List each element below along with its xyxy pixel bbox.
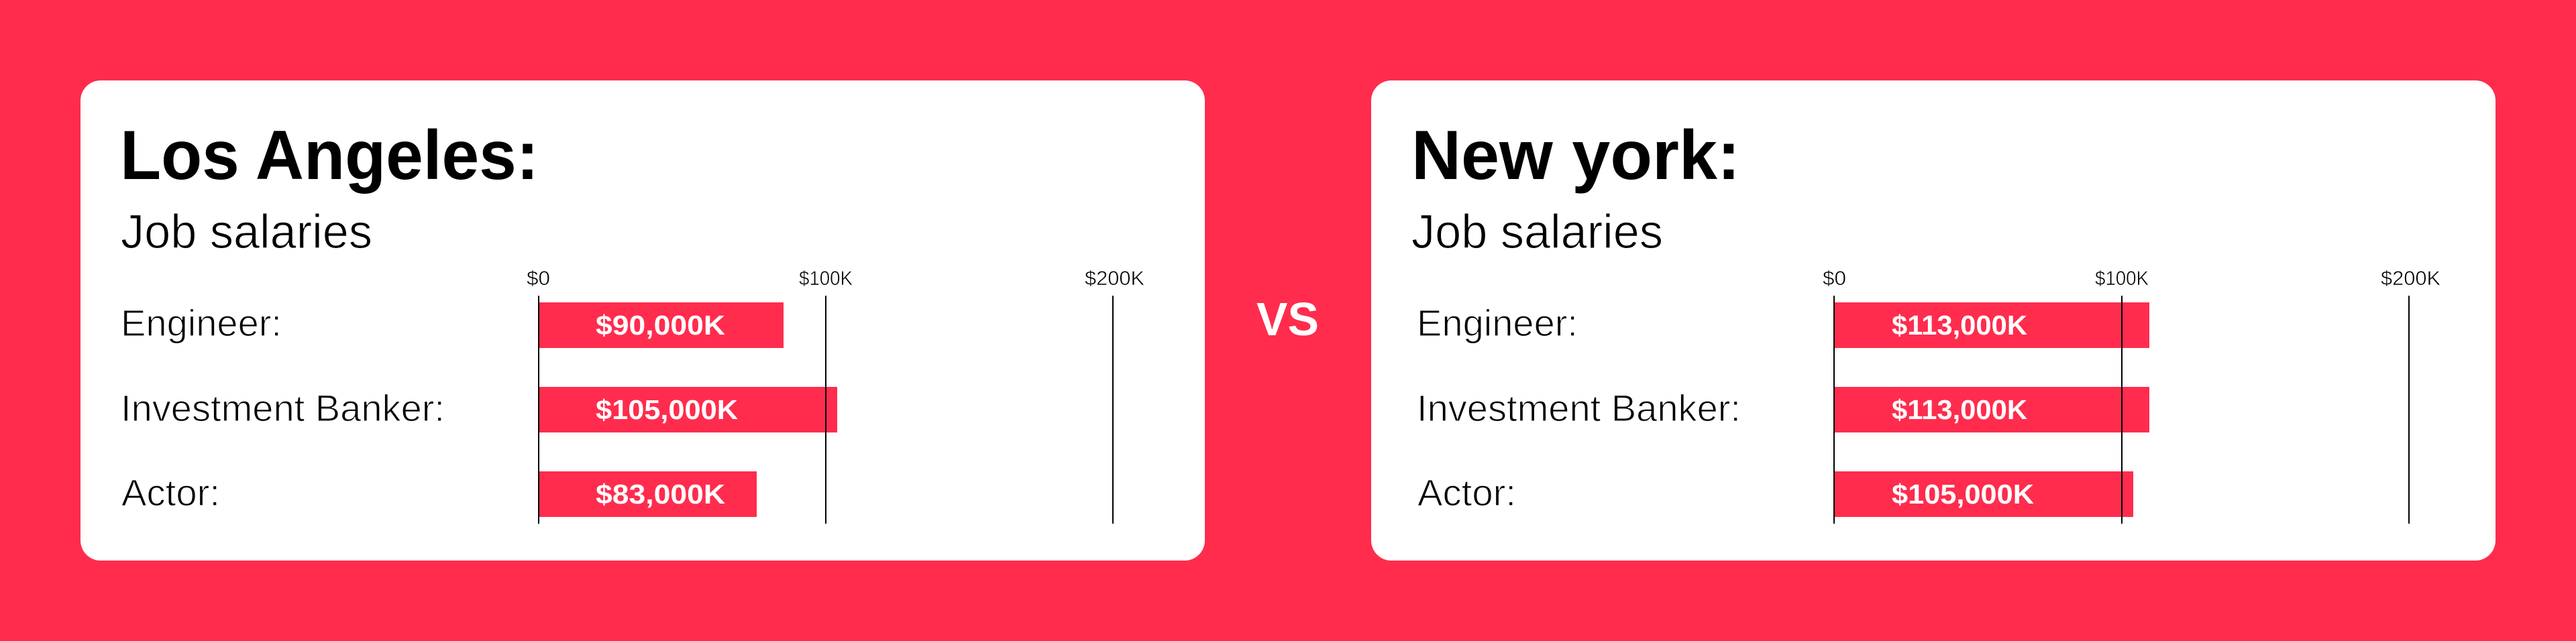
bar: Actor $83,000K: $83,000K: [596, 479, 725, 510]
bar: Actor $105,000K: [1834, 471, 2133, 517]
axis label: $100K: $100K: [2095, 268, 2149, 290]
row label: Actor: Actor:: [1417, 471, 1516, 514]
bar: Engineer $113,000K: $113,000K: [1892, 310, 2027, 341]
bar: Investment Banker $113,000K: [1834, 387, 2149, 432]
title: Los Angeles: Los Angeles:: [120, 117, 539, 194]
row label: Engineer: Engineer:: [1417, 302, 1578, 344]
bar: Investment Banker $105,000K: [539, 387, 837, 432]
title: New york: New york:: [1411, 117, 1740, 194]
subtitle: Job salaries: Job salaries: [121, 206, 372, 259]
row label: Investment Banker: Investment Banker:: [121, 387, 445, 429]
axis label: $0: $0: [1823, 268, 1846, 290]
bar chart: Los Angeles salaries: [527, 268, 1144, 524]
bar: Engineer $90,000K: [539, 302, 784, 348]
axis label: $100K: $100K: [799, 268, 853, 290]
axis label: $0: $0: [527, 268, 550, 290]
row label: Engineer: Engineer:: [121, 302, 282, 344]
bar: Actor $105,000K: $105,000K: [1892, 479, 2034, 510]
axis label: $200K: $200K: [1085, 268, 1144, 290]
subtitle: Job salaries: Job salaries: [1411, 206, 1663, 259]
bar: Engineer $113,000K: [1834, 302, 2149, 348]
vs label: VS: [1256, 293, 1319, 345]
row label: Investment Banker: Investment Banker:: [1417, 387, 1741, 429]
row label: Actor: Actor:: [121, 471, 220, 514]
bar: Investment Banker $105,000K: $105,000K: [596, 394, 738, 425]
panel: New York: [1371, 80, 2496, 561]
axis label: $200K: $200K: [2381, 268, 2440, 290]
bar chart: New York salaries: [1823, 268, 2440, 524]
bar: Engineer $90,000K: $90,000K: [596, 310, 725, 341]
bar: Investment Banker $113,000K: $113,000K: [1892, 394, 2027, 425]
bar: Actor $83,000K: [539, 471, 757, 517]
panel: Los Angeles: [80, 80, 1205, 561]
